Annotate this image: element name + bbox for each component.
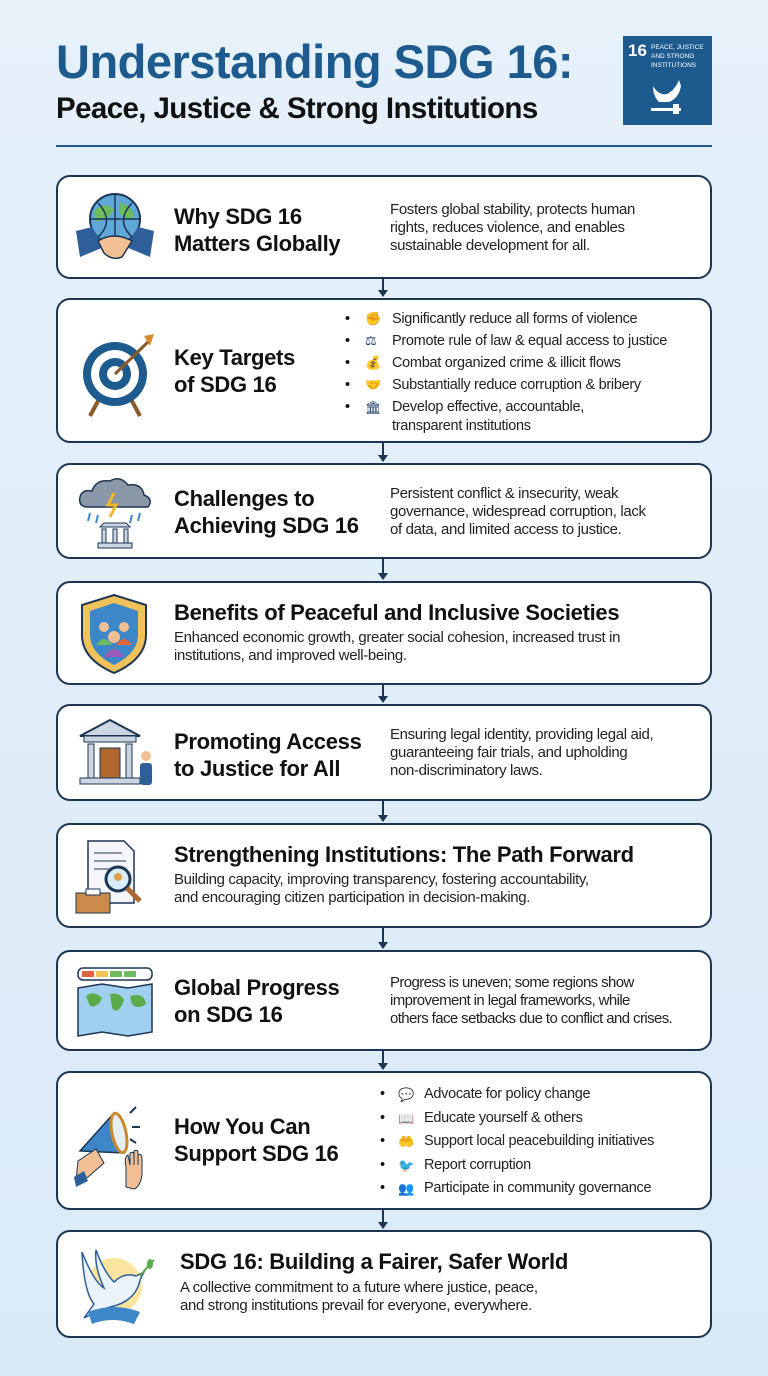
- arrow: [378, 1051, 388, 1070]
- text: Fosters global stability, protects human: [390, 201, 635, 218]
- list: actions: Participate in community governance: [424, 1180, 651, 1196]
- heading: Strengthening Institutions: The Path Forward: [174, 842, 634, 867]
- list: targets: ⚖: [365, 333, 376, 348]
- icon: storm over institution: [78, 478, 151, 548]
- text: institutions, and improved well-being.: [174, 647, 407, 664]
- arrow: [378, 443, 388, 462]
- heading: of SDG 16: [174, 372, 276, 397]
- panel: benefits: [56, 581, 712, 685]
- text: guaranteeing fair trials, and upholding: [390, 744, 627, 761]
- list: actions: 💬: [398, 1087, 414, 1102]
- heading: Promoting Access: [174, 729, 362, 754]
- list: targets: 💰: [365, 355, 381, 370]
- text: sustainable development for all.: [390, 237, 590, 254]
- arrow: [378, 1210, 388, 1229]
- panel: global progress: [56, 950, 712, 1051]
- panel: conclusion: [56, 1230, 712, 1338]
- panel: challenges: [56, 463, 712, 559]
- list: actions: 🤲: [398, 1134, 414, 1149]
- arrow: [378, 559, 388, 580]
- icon: megaphone and hand: [74, 1106, 142, 1190]
- heading: SDG 16: Building a Fairer, Safer World: [180, 1249, 568, 1274]
- list: actions: Report corruption: [424, 1156, 531, 1172]
- text: [174, 871, 589, 906]
- icon: target: [83, 334, 154, 417]
- text: others face setbacks due to conflict and crises.: [390, 1010, 672, 1027]
- heading: [174, 486, 359, 538]
- text: [390, 726, 653, 779]
- icon: map with progress bar: [77, 967, 153, 1037]
- list: actions: [380, 1086, 654, 1196]
- text: [174, 629, 620, 664]
- arrow: [378, 928, 388, 949]
- heading: [174, 1114, 338, 1166]
- text: and encouraging citizen participation in decision-making.: [174, 889, 530, 906]
- heading: [174, 729, 362, 781]
- list: targets: [346, 311, 667, 434]
- panel: why matters: [56, 175, 712, 279]
- heading: Why SDG 16: [174, 204, 302, 229]
- heading: How You Can: [174, 1114, 310, 1139]
- icon: SDG 16 logo: [623, 36, 712, 125]
- title: Understanding SDG 16:: [56, 35, 573, 88]
- text: improvement in legal frameworks, while: [390, 992, 630, 1009]
- panel: strengthening institutions: [56, 823, 712, 928]
- text: A collective commitment to a future where justice, peace,: [180, 1279, 538, 1296]
- list: actions: 📖: [398, 1110, 414, 1126]
- arrow: [378, 685, 388, 703]
- heading: to Justice for All: [174, 756, 340, 781]
- list: targets: Promote rule of law & equal access to justice: [392, 333, 667, 349]
- heading: Key Targets: [174, 345, 295, 370]
- list: targets: transparent institutions: [392, 418, 531, 434]
- list: actions: 🐦: [398, 1158, 414, 1172]
- heading: on SDG 16: [174, 1002, 283, 1027]
- list: targets: 🤝: [365, 377, 381, 392]
- heading: Support SDG 16: [174, 1141, 338, 1166]
- text: non-discriminatory laws.: [390, 762, 542, 779]
- list: targets: Develop effective, accountable,: [392, 399, 584, 415]
- text: Persistent conflict & insecurity, weak: [390, 485, 618, 502]
- text: [390, 201, 635, 254]
- list: targets: Combat organized crime & illicit flows: [392, 355, 621, 371]
- list: actions: Advocate for policy change: [424, 1086, 590, 1102]
- icon: shield with people: [81, 594, 147, 674]
- heading: [174, 204, 340, 256]
- list: actions: Educate yourself & others: [424, 1110, 583, 1126]
- arrow: [378, 279, 388, 297]
- icon: courthouse: [80, 718, 152, 785]
- text: [390, 485, 646, 538]
- text: of data, and limited access to justice.: [390, 521, 621, 538]
- list: actions: Support local peacebuilding initiatives: [424, 1133, 654, 1149]
- text: and strong institutions prevail for everyone, everywhere.: [180, 1297, 532, 1314]
- icon: SDG 16 logo: PEACE, JUSTICE: [651, 44, 704, 51]
- list: targets: ✊: [365, 311, 381, 326]
- text: [390, 974, 672, 1027]
- list: actions: 👥: [398, 1181, 414, 1196]
- icon: dove: [81, 1250, 155, 1324]
- text: rights, reduces violence, and enables: [390, 219, 625, 236]
- heading: [174, 345, 295, 397]
- list: targets: Substantially reduce corruption & bribery: [392, 377, 641, 393]
- text: Progress is uneven; some regions show: [390, 974, 634, 991]
- icon: SDG 16 logo: AND STRONG: [651, 53, 694, 60]
- heading: Achieving SDG 16: [174, 513, 359, 538]
- panel: access to justice: [56, 704, 712, 801]
- arrow: [378, 801, 388, 822]
- list: targets: 🏛: [365, 400, 381, 415]
- text: governance, widespread corruption, lack: [390, 503, 646, 520]
- text: Enhanced economic growth, greater social cohesion, increased trust in: [174, 629, 620, 646]
- heading: Global Progress: [174, 975, 339, 1000]
- icon: SDG 16 logo: 16: [628, 41, 647, 60]
- icon: document magnifier: [76, 840, 142, 914]
- text: Building capacity, improving transparency, fostering accountability,: [174, 871, 589, 888]
- panel: how you can support: [56, 1071, 712, 1210]
- text: [180, 1279, 538, 1314]
- heading: Challenges to: [174, 486, 314, 511]
- list: targets: Significantly reduce all forms of violence: [392, 311, 637, 327]
- panel: key targets: [56, 298, 712, 443]
- heading: Benefits of Peaceful and Inclusive Societies: [174, 600, 619, 625]
- heading: [174, 975, 339, 1027]
- heading: Matters Globally: [174, 231, 340, 256]
- text: Ensuring legal identity, providing legal aid,: [390, 726, 653, 743]
- subtitle: Peace, Justice & Strong Institutions: [56, 92, 538, 125]
- icon: SDG 16 logo: INSTITUTIONS: [651, 62, 696, 69]
- icon: globe handshake: [76, 193, 154, 260]
